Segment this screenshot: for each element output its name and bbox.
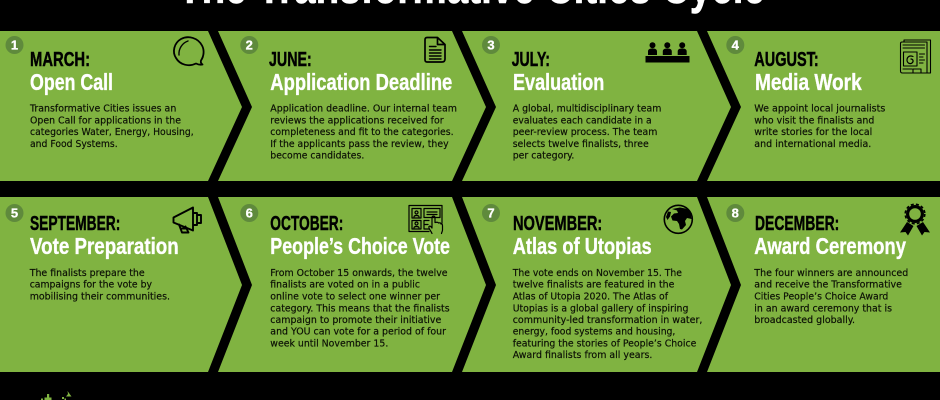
panel: step 5 September: mobilising their communities. (30, 291, 170, 302)
panel: step 6 October: From October 15 onwards, the twelve (270, 268, 448, 279)
panel: step 1 March: 1 (11, 38, 18, 53)
panel: step 7 November: Award finalists from all years. (513, 350, 652, 361)
panel: step 2 June: reviews the applications received for (270, 115, 444, 126)
panel: step 4 August: 4 (732, 38, 740, 53)
panel: step 5 September: The finalists prepare the (29, 268, 145, 279)
panel: step 2 June: If the applicants pass the review, they (270, 139, 449, 150)
panel: step 6 October: category. This means that the finalists (270, 303, 450, 314)
panel: step 4 August: Media Work (755, 69, 862, 95)
panel: step 7 November: Atlas of Utopias (513, 233, 652, 259)
panel: step 3 July: selects twelve finalists, three (513, 139, 649, 150)
panel: step 3 July (462, 31, 731, 181)
panel: step 2 June: Application Deadline (270, 69, 452, 95)
panel: step 5 September: SEPTEMBER: (30, 212, 120, 235)
panel: step 7 November: community-led transformation in water, (513, 315, 702, 326)
panel: step 6 October: OCTOBER: (270, 212, 343, 235)
panel: step 1 March (0, 31, 242, 181)
panel: step 3 July: per category. (513, 151, 574, 162)
panel: step 6 October (218, 197, 486, 372)
panel: step 4 August: and international media. (754, 139, 871, 150)
panel: step 8 December: broadcasted globally. (754, 315, 855, 326)
panel: step 6 October: finalists are voted on in a public (270, 280, 420, 291)
logo fragment (41, 391, 72, 400)
panel: step 2 June: Application deadline. Our internal team (270, 104, 457, 115)
panel: step 8 December (707, 197, 940, 372)
panel: step 7 November: energy, food systems and housing, (513, 327, 675, 338)
panel: step 2 June (218, 31, 486, 181)
panel: step 1 March: and Food Systems. (30, 139, 118, 150)
panel: step 4 August: write stories for the local (754, 127, 872, 138)
panel: step 6 October: 6 (246, 206, 253, 221)
panel: step 8 December: The four winners are announced (753, 268, 908, 279)
panel: step 1 March: Transformative Cities issues an (29, 104, 176, 115)
panel: step 7 November (462, 197, 731, 372)
panel: step 6 October: and YOU can vote for a period of four (270, 327, 447, 338)
panel: step 7 November: twelve finalists are featured in the (513, 280, 674, 291)
panel: step 3 July: JULY: (512, 48, 550, 71)
panel: step 4 August: We appoint local journalists (754, 104, 885, 115)
panel: step 5 September (0, 197, 242, 372)
panel: step 5 September: Vote Preparation (30, 233, 179, 259)
panel: step 8 December: in an award ceremony that is (754, 303, 892, 314)
panel: step 7 November: NOVEMBER: (513, 212, 602, 235)
panel: step 5 September: campaigns for the vote by (30, 280, 152, 291)
panel: step 2 June: 2 (246, 38, 253, 53)
panel: step 1 March: MARCH: (30, 48, 90, 71)
panel: step 4 August: who visit the finalists and (754, 115, 874, 126)
panel: step 3 July: peer-review process. The team (513, 127, 657, 138)
panel: step 8 December: DECEMBER: (755, 212, 839, 235)
panel: step 1 March: Open Call (30, 69, 113, 95)
panel: step 2 June: become candidates. (270, 151, 364, 162)
panel: step 6 October: campaign to promote their initiative (270, 315, 441, 326)
panel: step 2 June: JUNE: (269, 48, 312, 71)
panel: step 8 December: 8 (732, 206, 739, 221)
panel: step 1 March: categories Water, Energy, Housing, (30, 127, 194, 138)
panel: step 6 October: People’s Choice Vote (270, 233, 450, 259)
panel: step 3 July: 3 (487, 38, 495, 53)
panel: step 8 December: Cities People’s Choice Award (754, 291, 888, 302)
panel: step 3 July: Evaluation (513, 69, 604, 95)
panel: step 6 October: week until November 15. (270, 338, 388, 349)
panel: step 4 August: AUGUST: (754, 48, 819, 71)
panel: step 3 July: A global, multidisciplinary team (513, 104, 661, 115)
panel: step 4 August (707, 31, 940, 181)
panel: step 6 October: online vote to select one winner per (270, 291, 441, 302)
panel: step 3 July: evaluates each candidate in a (513, 115, 652, 126)
panel: step 7 November: featuring the stories of People’s Choice (513, 338, 696, 349)
panel: step 7 November: Utopias is a global gallery of inspiring (513, 303, 688, 314)
panel: step 7 November: The vote ends on November 15. The (512, 268, 682, 279)
panel: step 1 March: Open Call for applications in the (30, 115, 181, 126)
panel: step 8 December: and receive the Transformative (754, 280, 902, 291)
panel: step 2 June: completeness and fit to the categories. (270, 127, 454, 138)
panel: step 7 November: 7 (487, 206, 495, 221)
panel: step 7 November: Atlas of Utopia 2020. The Atlas of (513, 291, 668, 302)
panel: step 5 September: 5 (11, 206, 18, 221)
